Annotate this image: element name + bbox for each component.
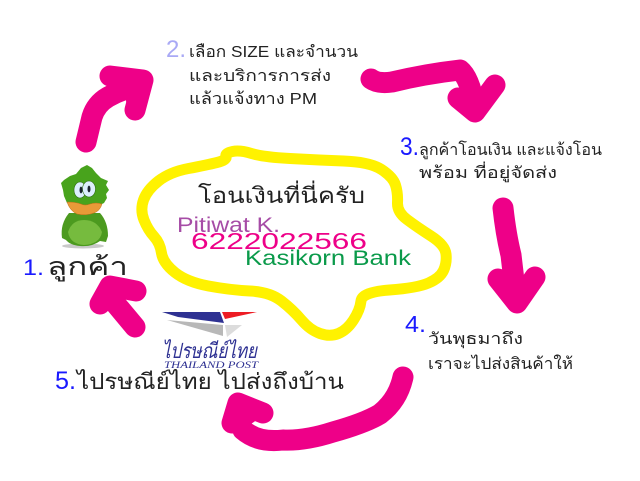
step 3 line 2: พร้อม ที่อยู่จัดส่ง	[419, 161, 557, 183]
step 1 label: ลูกค้า	[47, 253, 128, 282]
step 3 line 1: ลูกค้าโอนเงิน และแจ้งโอน	[419, 140, 602, 160]
step 4: delivery	[405, 311, 573, 373]
account name: Pitiwat K.	[177, 214, 280, 237]
account number: 6222022566	[191, 228, 367, 254]
bank name: Kasikorn Bank	[245, 247, 412, 270]
step number 5: 5.	[55, 367, 76, 395]
step 2: choose size	[166, 36, 358, 108]
duck head	[61, 165, 109, 206]
payment heading: โอนเงินที่นี่ครับ	[198, 180, 365, 208]
step 2 line 1: เลือก SIZE และจำนวน	[189, 43, 358, 61]
step 4 line 2: เราจะไปส่งสินค้าให้	[428, 354, 573, 373]
duck bill	[67, 202, 102, 215]
arrow: step 3 to step 4	[498, 208, 535, 303]
icon: Thailand Post logo	[162, 312, 259, 370]
yellow outline around payment details	[142, 151, 446, 335]
duck body	[62, 213, 108, 246]
icon: green duck mascot	[61, 165, 109, 248]
logo wing	[162, 312, 224, 323]
arrow: customer to step 2	[86, 76, 143, 142]
step 2 line 2: และบริการการส่ง	[189, 68, 331, 85]
logo English wordmark: THAILAND POST	[164, 360, 259, 370]
step 3: transfer	[400, 133, 602, 183]
step number 1: 1.	[23, 255, 44, 280]
step 2 line 3: แล้วแจ้งทาง PM	[189, 90, 317, 108]
arrow: step 5 to customer	[100, 286, 136, 327]
step 5: post	[55, 367, 344, 395]
arrow: step 2 to step 3	[371, 70, 495, 112]
step 4 line 1: วันพุธมาถึง	[428, 331, 523, 349]
duck shadow	[62, 244, 104, 248]
step number 4: 4.	[405, 311, 426, 337]
step number 2: 2.	[166, 36, 186, 63]
payment details	[177, 180, 412, 270]
arrow: step 4 to step 5	[232, 377, 403, 441]
step number 3: 3.	[400, 133, 419, 161]
duck eyes	[74, 181, 96, 198]
step 1: customer	[23, 253, 128, 282]
step 5 label: ไปรษณีย์ไทย ไปส่งถึงบ้าน	[75, 369, 344, 394]
logo Thai wordmark: ไปรษณีย์ไทย	[162, 339, 258, 363]
